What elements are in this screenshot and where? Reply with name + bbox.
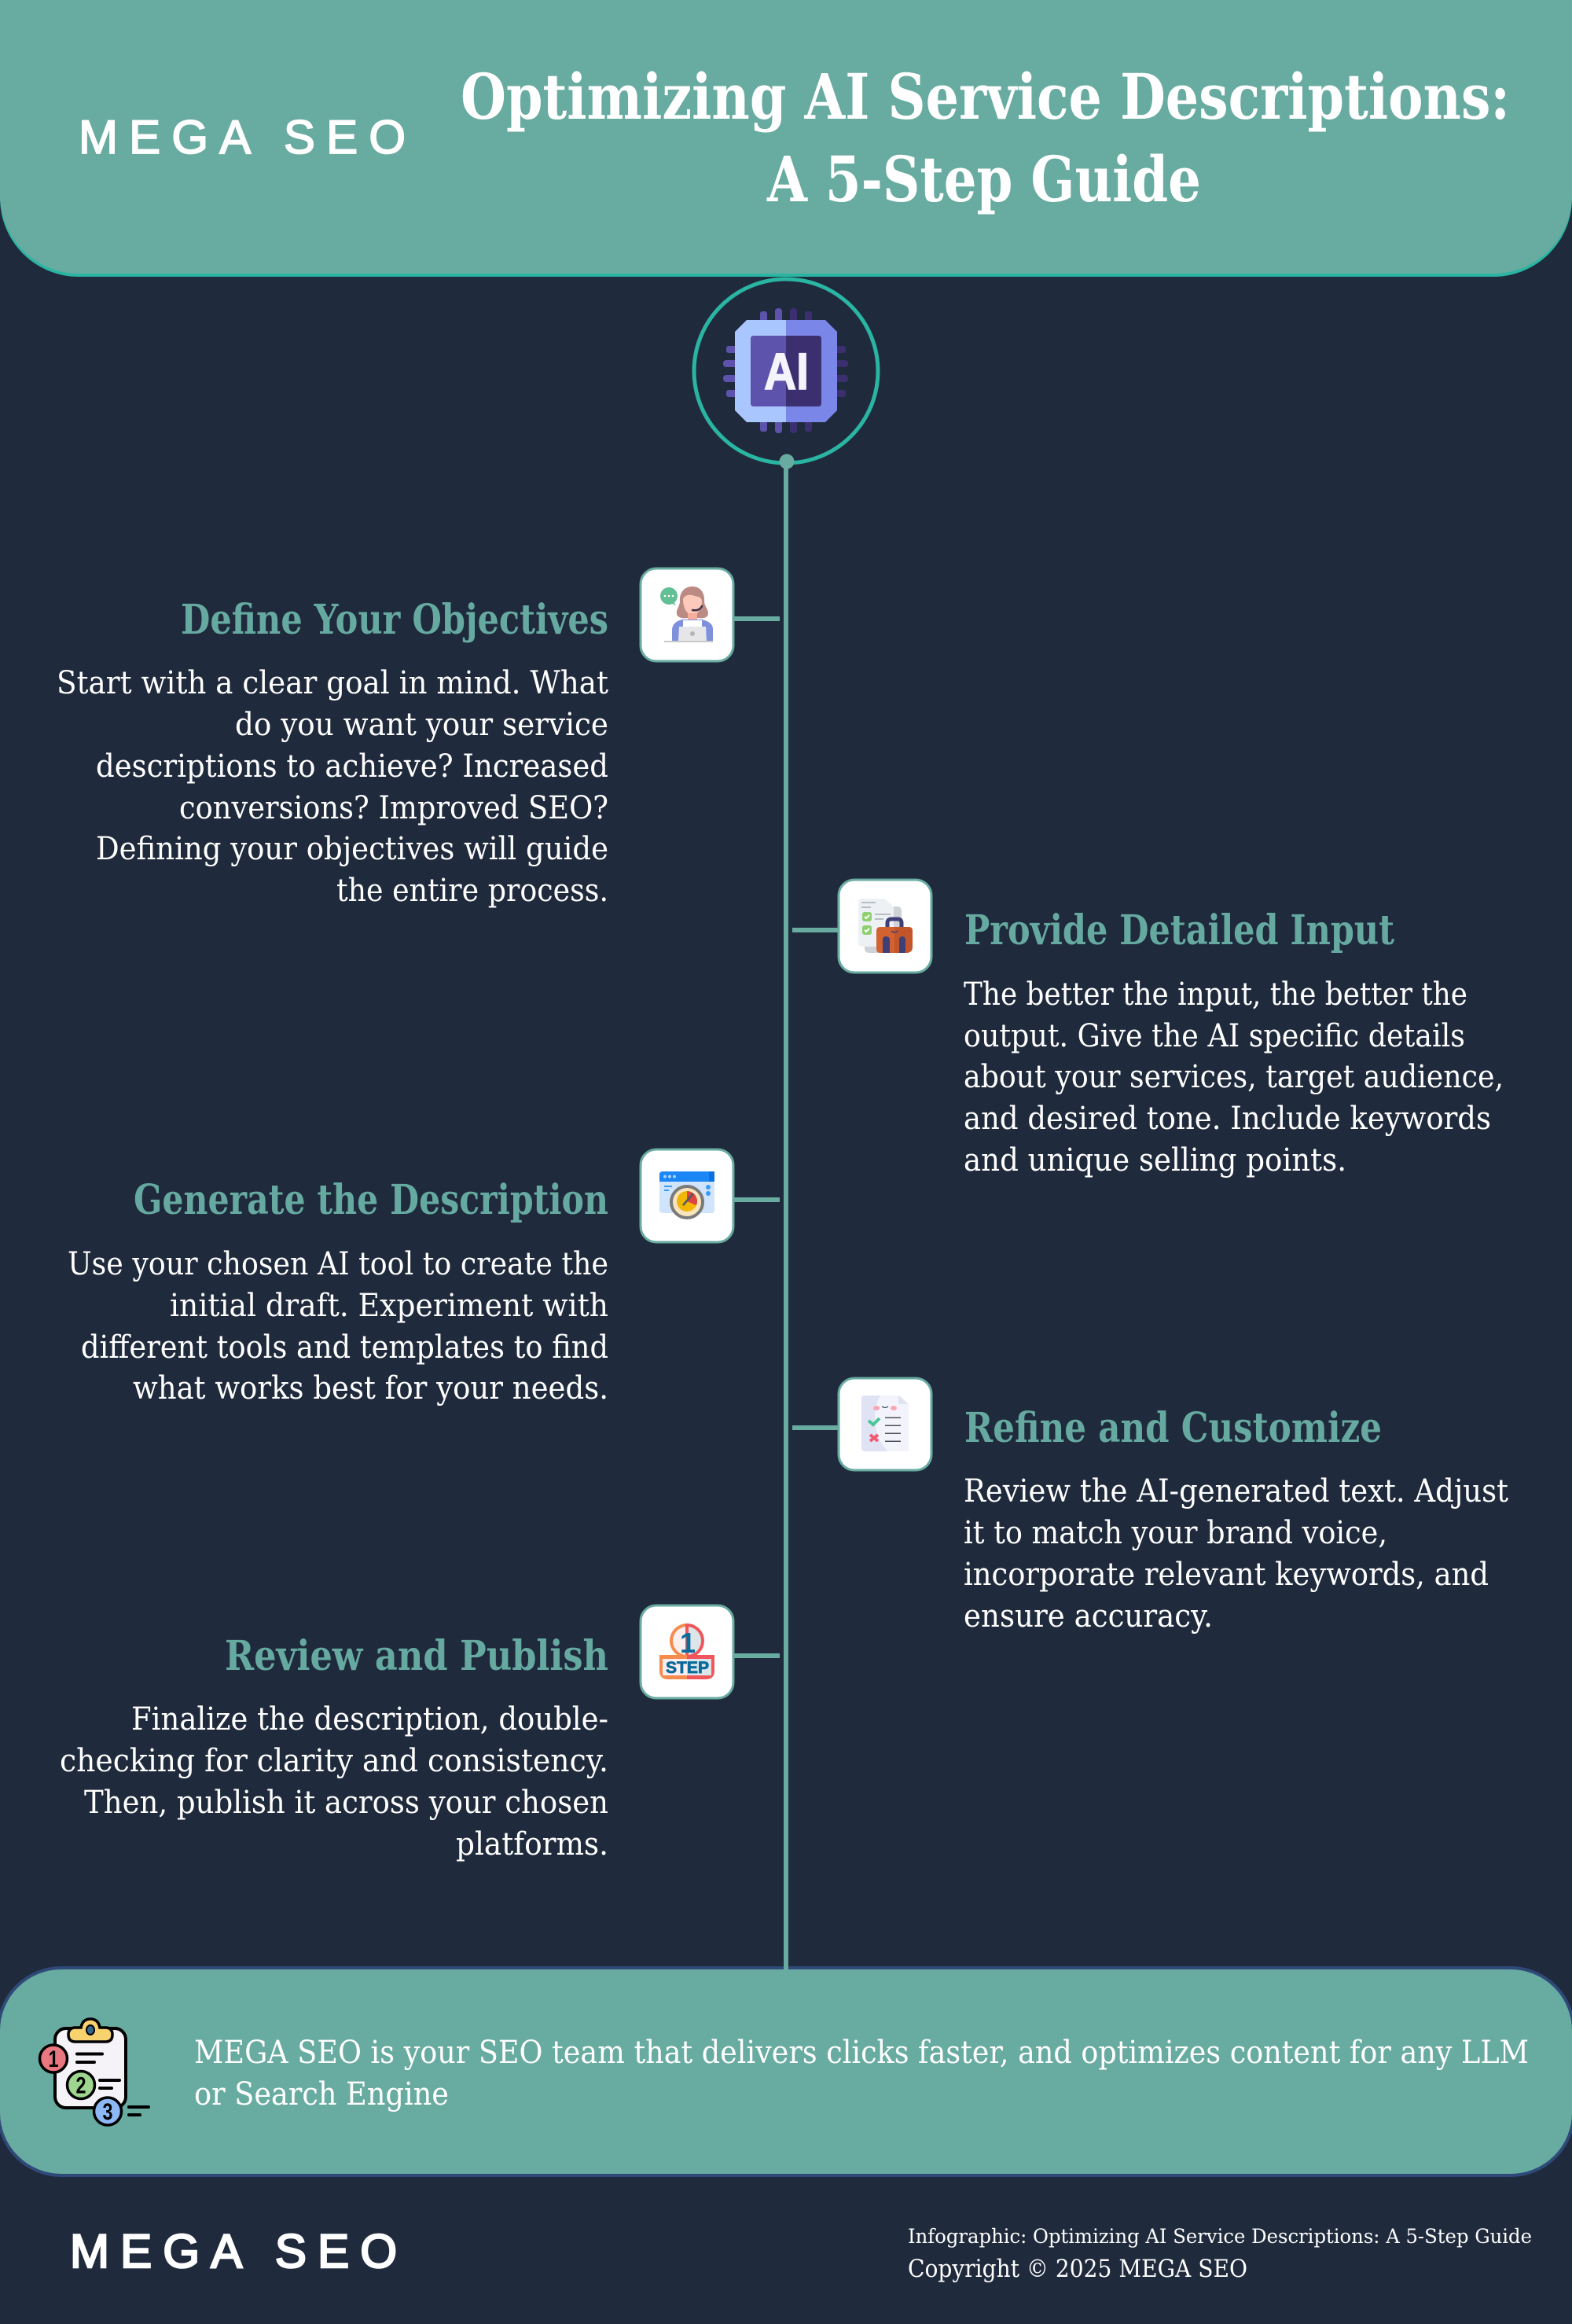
step 5: Review and Publish <box>60 1605 780 1863</box>
body text 4 <box>964 1473 1508 1635</box>
icon: step one badge <box>641 1605 733 1698</box>
body text 2: and desired tone. Include keywords <box>964 1101 1491 1137</box>
step 2: Provide Detailed Input <box>792 880 1504 1179</box>
footer text: Copyright © 2025 MEGA SEO <box>908 2255 1247 2283</box>
body text 1: do you want your service <box>235 707 608 743</box>
body text 5 <box>60 1701 608 1863</box>
connector 4 <box>792 1425 839 1430</box>
body text 1: descriptions to achieve? Increased <box>96 748 608 785</box>
icon: numbered clipboard: 1 <box>49 2046 58 2072</box>
connector 1 <box>733 616 780 621</box>
heading 2: Provide Detailed Input <box>964 906 1394 954</box>
title <box>461 60 1510 216</box>
body text 3: different tools and templates to find <box>81 1329 608 1366</box>
body text 1: Start with a clear goal in mind. What <box>57 665 608 701</box>
body text 5: Then, publish it across your chosen <box>84 1785 608 1821</box>
body text 5: Finalize the description, double- <box>131 1701 608 1737</box>
body text 2: output. Give the AI specific details <box>964 1018 1465 1054</box>
icon: AI chip in circle <box>694 279 878 463</box>
step 1: Define Your Objectives <box>57 568 780 909</box>
body text 5: platforms. <box>456 1826 608 1863</box>
call to action text: or Search Engine <box>194 2076 449 2113</box>
heading 1: Define Your Objectives <box>181 596 608 644</box>
logo: footer MEGA SEO: MEGA SEO <box>70 2225 397 2278</box>
title: A 5-Step Guide <box>766 142 1201 216</box>
connector 2 <box>792 928 839 932</box>
connector 5 <box>733 1653 780 1658</box>
icon: browser window gauge <box>641 1149 733 1242</box>
body text 3 <box>68 1246 608 1407</box>
body text 1 <box>57 665 608 909</box>
body text 2: and unique selling points. <box>964 1142 1346 1179</box>
call to action text <box>194 2035 1529 2113</box>
footer text <box>908 2225 1532 2283</box>
panel: header <box>0 0 1572 277</box>
body text 4: ensure accuracy. <box>964 1598 1213 1635</box>
body text 1: conversions? Improved SEO? <box>179 790 608 826</box>
icon: numbered clipboard <box>39 2019 149 2125</box>
body text 1: Defining your objectives will guide <box>96 831 608 867</box>
timeline top dot <box>780 454 794 469</box>
icon: numbered clipboard: 3 <box>102 2099 113 2125</box>
body text 4: Review the AI-generated text. Adjust <box>964 1473 1508 1509</box>
icon: numbered clipboard: 2 <box>75 2072 86 2099</box>
body text 2 <box>964 976 1504 1179</box>
body text 1: the entire process. <box>336 873 608 909</box>
body text 2: about your services, target audience, <box>964 1059 1504 1095</box>
connector 3 <box>733 1197 780 1202</box>
icon: step one badge: 1 <box>680 1627 696 1659</box>
footer text: Infographic: Optimizing AI Service Descriptions: A 5-Step Guide <box>908 2225 1532 2248</box>
step 3: Generate the Description <box>68 1149 780 1407</box>
icon: support agent <box>641 568 733 661</box>
heading 3: Generate the Description <box>134 1176 608 1224</box>
heading 5: Review and Publish <box>225 1632 608 1680</box>
body text 3: initial draft. Experiment with <box>170 1288 608 1324</box>
timeline vertical line <box>784 461 788 1969</box>
heading 4: Refine and Customize <box>964 1404 1382 1452</box>
body text 2: The better the input, the better the <box>964 976 1467 1013</box>
icon: step one badge: STEP <box>666 1659 709 1677</box>
step 4: Refine and Customize <box>792 1378 1508 1635</box>
logo: header MEGA SEO: MEGA SEO <box>79 111 406 164</box>
body text 3: Use your chosen AI tool to create the <box>68 1246 608 1282</box>
icon: AI chip in circle: AI <box>764 342 809 400</box>
body text 4: it to match your brand voice, <box>964 1515 1387 1551</box>
panel: call to action band <box>0 1968 1572 2175</box>
body text 3: what works best for your needs. <box>133 1370 608 1407</box>
body text 5: checking for clarity and consistency. <box>60 1743 608 1779</box>
icon: checklist page <box>839 1378 931 1470</box>
icon: documents and briefcase <box>839 880 931 973</box>
body text 4: incorporate relevant keywords, and <box>964 1557 1489 1593</box>
